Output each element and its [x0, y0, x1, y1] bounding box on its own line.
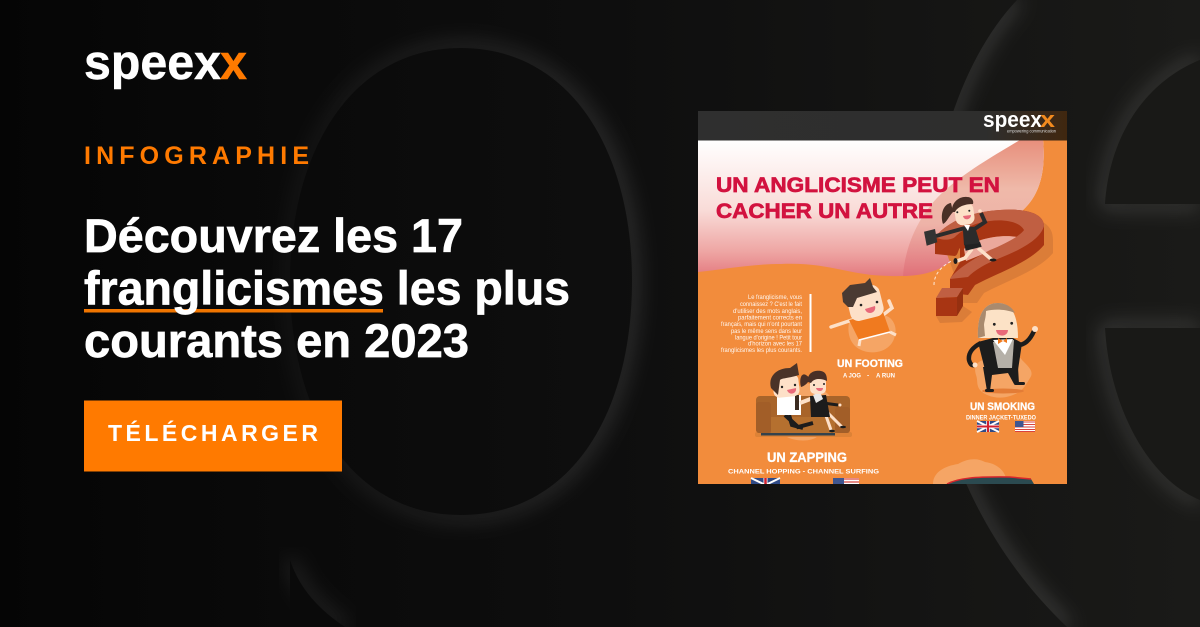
eyebrow: infographie: INFOGRAPHIE — [84, 142, 309, 170]
label: un zapping with flags: UN ZAPPING — [767, 449, 847, 465]
infographic title: CACHER UN AUTRE — [716, 199, 933, 223]
infographic preview panel — [698, 107, 1067, 492]
button: télécharger — [84, 400, 342, 472]
intro text block: d'utiliser des mots anglais, — [733, 308, 802, 315]
label: un smoking with flags: DINNER JACKET-TUXEDO — [966, 414, 1036, 422]
intro text block: connaissez ? C'est le fait — [740, 301, 802, 308]
character: running woman with briefcase — [924, 197, 996, 285]
flag: US — [833, 478, 859, 484]
intro text block — [721, 294, 803, 354]
salmon overlay shape — [903, 140, 1044, 276]
headline underline — [84, 309, 383, 312]
icon: 3D question mark — [935, 210, 1053, 323]
text divider bar — [810, 294, 812, 352]
character: couple on sofa — [755, 363, 852, 440]
infographic title: UN ANGLICISME PEUT EN — [716, 173, 1000, 197]
flag: UK — [977, 421, 999, 432]
header bar: x — [1040, 107, 1056, 132]
headline: courants en 2023 — [84, 315, 469, 368]
header bar: empowering communication — [1007, 128, 1056, 134]
headline: Découvrez les 17 — [84, 210, 463, 263]
label: un zapping with flags — [728, 452, 879, 484]
flag: US — [1015, 421, 1035, 432]
label: un footing — [838, 359, 902, 378]
flag: UK — [750, 477, 780, 484]
infographic title — [716, 177, 999, 218]
button: télécharger: TÉLÉCHARGER — [108, 419, 318, 446]
label: un zapping with flags: CHANNEL HOPPING - CHANNEL SURFING — [728, 468, 879, 476]
character: man in tuxedo — [969, 303, 1038, 398]
intro text block: franglicismes les plus courants. — [721, 347, 802, 354]
label: un smoking with flags — [966, 401, 1036, 432]
pink hero wave — [698, 140, 1044, 276]
logo: speexx: speex — [84, 36, 221, 90]
label: un footing: UN FOOTING — [837, 358, 903, 370]
header bar — [698, 111, 1067, 140]
headline: franglicismes les plus — [84, 262, 570, 316]
logo: speexx: x — [220, 36, 247, 90]
headline — [84, 210, 570, 368]
label: un footing: A JOG — [843, 372, 861, 380]
character: jogging man — [831, 278, 896, 352]
label: un smoking with flags: UN SMOKING — [970, 401, 1035, 413]
intro text block: pas le même sens dans leur — [731, 328, 802, 335]
label: un footing: A RUN — [876, 372, 895, 380]
header bar: speex — [983, 107, 1043, 132]
intro text block: français, mais qui n'ont pourtant — [721, 321, 802, 328]
intro text block: Le franglicisme, vous — [748, 294, 802, 301]
intro text block: d'horizon avec les 17 — [748, 340, 803, 348]
label: un footing: - — [867, 372, 869, 380]
background with oversized ghost letters — [294, 0, 1200, 627]
intro text block: langue d'origine ! Petit tour — [735, 334, 802, 342]
intro text block: parfaitement corrects en — [738, 314, 803, 322]
blob and car peeking at panel bottom — [933, 459, 1034, 484]
